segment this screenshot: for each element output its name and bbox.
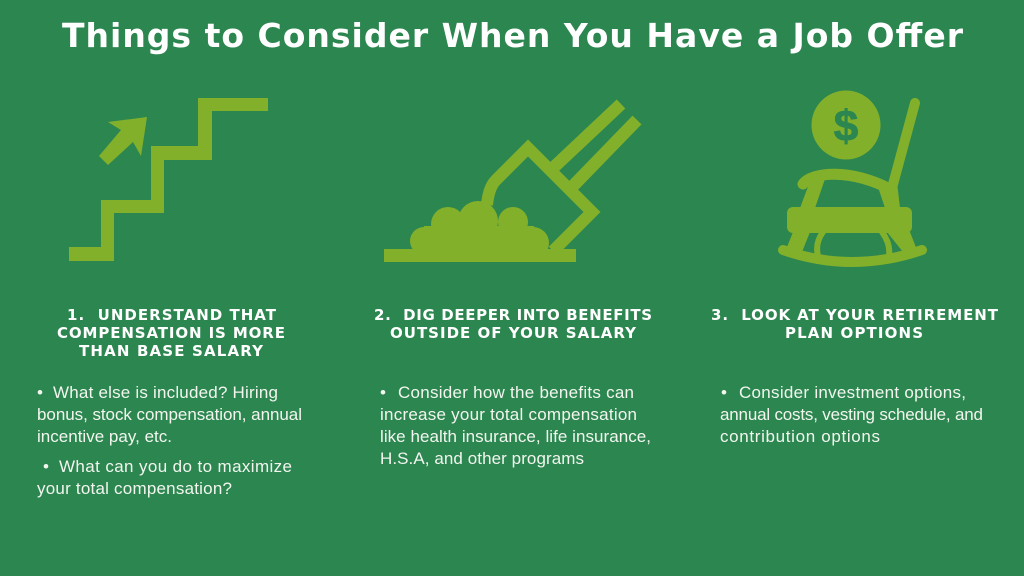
text: retirement bullets: • [721, 383, 727, 402]
text: retirement bullets: Consider investment options, [739, 383, 966, 402]
text: benefits bullets [380, 383, 651, 468]
icon: stairs with arrow [69, 98, 268, 261]
text: benefits bullets: H.S.A, and other programs [380, 449, 584, 468]
heading: retirement: PLAN OPTIONS [785, 324, 923, 342]
title: Things to Consider When You Have a Job Offer [62, 16, 964, 55]
heading: benefits [374, 306, 652, 342]
text: compensation bullets: What can you do to maximize [59, 457, 292, 476]
panel: benefits [374, 104, 652, 468]
panel: retirement [711, 90, 999, 446]
heading: retirement: 3. LOOK AT YOUR RETIREMENT [711, 306, 999, 324]
text: benefits bullets: • [380, 383, 386, 402]
text: retirement bullets: contribution options [720, 427, 880, 446]
icon: rocking chair with dollar coin [783, 90, 922, 262]
heading: benefits: 2. DIG DEEPER INTO BENEFITS [374, 306, 652, 324]
text: compensation bullets: • [43, 457, 49, 476]
text: benefits bullets: increase your total compensation [380, 405, 637, 424]
heading: compensation [57, 306, 285, 360]
text: compensation bullets: incentive pay, etc. [37, 427, 172, 446]
text: retirement bullets [720, 383, 983, 446]
text: compensation bullets: bonus, stock compensation, annual [37, 405, 302, 424]
text: retirement bullets: annual costs, vesting schedule, and [720, 405, 983, 424]
heading: compensation: 1. UNDERSTAND THAT [67, 306, 277, 324]
text: compensation bullets: What else is included? Hiring [53, 383, 278, 402]
text: compensation bullets [37, 383, 302, 498]
icon: shovel and dirt [384, 104, 637, 262]
heading: compensation: COMPENSATION IS MORE [57, 324, 285, 342]
text: benefits bullets: Consider how the benefits can [398, 383, 634, 402]
text: benefits bullets: like health insurance, life insurance, [380, 427, 651, 446]
icon: rocking chair with dollar coin: $ [834, 102, 858, 151]
text: compensation bullets: your total compensation? [37, 479, 232, 498]
heading: benefits: OUTSIDE OF YOUR SALARY [390, 324, 637, 342]
heading: retirement [711, 306, 999, 342]
panel: compensation [37, 98, 302, 498]
text: compensation bullets: • [37, 383, 43, 402]
heading: compensation: THAN BASE SALARY [79, 342, 264, 360]
